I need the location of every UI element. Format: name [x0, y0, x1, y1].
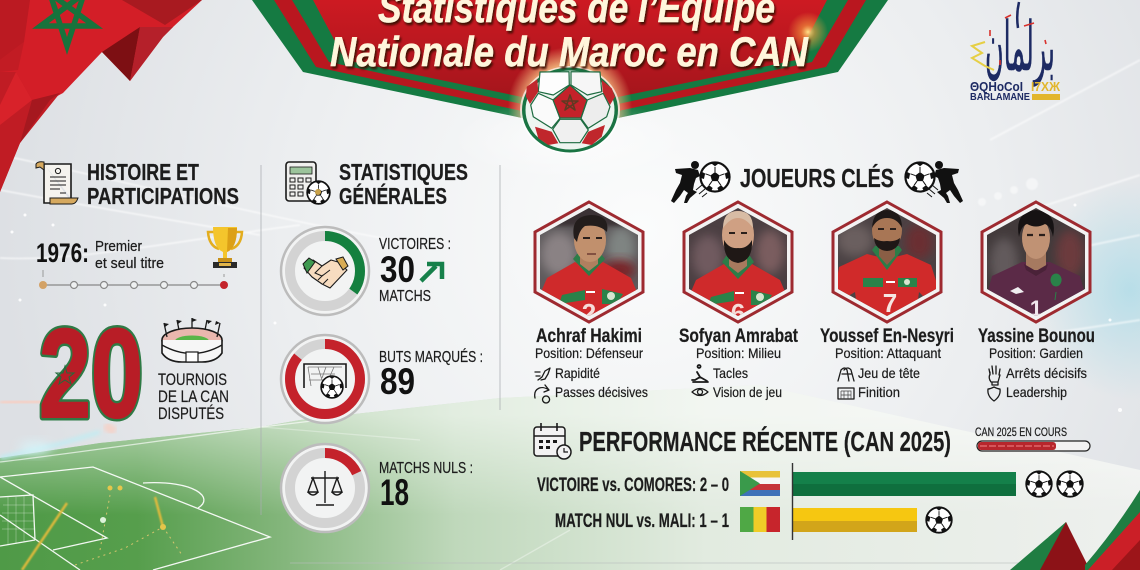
- player card: Sofyan Amrabat: [678, 202, 799, 400]
- portrait: Bounou: [976, 202, 1096, 322]
- portrait: Amrabat: 6: [731, 298, 745, 328]
- panel: statistiques generales: [281, 159, 483, 532]
- player name: Youssef En-Nesyri: [820, 326, 954, 347]
- label: tournois: DISPUTÉS: [158, 404, 224, 423]
- stat ring: nuls: [281, 444, 473, 532]
- progress: CAN 2025 en cours: [975, 425, 1090, 451]
- axis line: [792, 463, 794, 540]
- stat ring: nuls: MATCHS NULS :: [379, 460, 473, 477]
- icon: shield: [988, 387, 1000, 401]
- stat ring: victoires: 30: [380, 249, 415, 290]
- pitch lines: [0, 420, 570, 570]
- top-left red polygon corner: [0, 0, 202, 192]
- stat ring: nuls: 18: [380, 472, 409, 513]
- logo: Barlamane: [970, 2, 1060, 103]
- icon: player right with ball: [905, 161, 963, 203]
- icon: calculator and ball: [286, 162, 330, 204]
- heading: performance: PERFORMANCE RÉCENTE (CAN 2025): [579, 426, 951, 457]
- logo: Barlamane: I7XЖ: [1031, 79, 1060, 94]
- player name: Achraf Hakimi: [536, 326, 642, 347]
- player name: Sofyan Amrabat: [679, 326, 799, 347]
- heading: histoire: HISTOIRE ET: [87, 159, 199, 185]
- icon: handshake: [303, 257, 348, 288]
- icon: header: [838, 368, 854, 381]
- icon: central football: [520, 66, 620, 154]
- icon: calendar and clock: [534, 423, 571, 459]
- stat ring: victoires: MATCHS: [379, 288, 431, 305]
- title text: Nationale du Maroc en CAN: [330, 28, 809, 75]
- vertical dividers: [261, 165, 500, 515]
- icon: ball: [1026, 471, 1052, 497]
- icon: assist: [535, 385, 550, 403]
- player card: Sofyan Amrabat: Tacles: [713, 365, 748, 381]
- label: tournois: DE LA CAN: [158, 387, 229, 406]
- heading: histoire: [87, 159, 239, 209]
- logo: Barlamane: BARLAMANE: [970, 92, 1030, 103]
- player card: Youssef En-Nesyri: Jeu de tête: [858, 365, 920, 381]
- bar row: mali: MATCH NUL vs. MALI: 1 – 1: [555, 511, 729, 532]
- progress: CAN 2025 en cours: CAN 2025 EN COURS: [975, 425, 1067, 439]
- bar row: mali: [555, 507, 952, 533]
- logo: Barlamane: ΘQHoCoI: [970, 79, 1023, 94]
- icon: scroll: [36, 162, 78, 204]
- timeline: [39, 270, 228, 289]
- year 1976: Premier: [95, 238, 142, 255]
- icon: eye: [692, 388, 708, 396]
- stat ring: victoires: [281, 227, 451, 315]
- icon: goal and ball: [304, 364, 346, 398]
- heading: statistiques: STATISTIQUES: [339, 159, 468, 185]
- player card: Achraf Hakimi: Rapidité: [555, 365, 600, 381]
- portrait: En-Nesyri: [827, 202, 947, 322]
- year 1976: 1976:: [36, 238, 89, 268]
- panel: performance recente: [534, 423, 1090, 540]
- heading: histoire: PARTICIPATIONS: [87, 183, 239, 209]
- icon: glove: [989, 366, 1000, 385]
- player card: Yassine Bounou: Leadership: [1006, 384, 1067, 400]
- icon: player left with ball: [671, 161, 730, 203]
- player card: Yassine Bounou: Arrêts décisifs: [1006, 365, 1087, 381]
- icon: tackle: [692, 365, 708, 382]
- flag: mali: [740, 507, 780, 532]
- flag: comores: [740, 471, 780, 496]
- stat ring: victoires: VICTOIRES :: [379, 236, 451, 253]
- player card: Yassine Bounou: [976, 202, 1096, 401]
- portrait: En-Nesyri: 7: [883, 288, 897, 318]
- big number 20: 20: [39, 303, 143, 444]
- title text: [330, 0, 809, 75]
- year 1976: [36, 238, 164, 272]
- player card: Youssef En-Nesyri: Finition: [858, 384, 900, 400]
- icon: moroccan star: [40, 0, 95, 46]
- player card: Youssef En-Nesyri: [820, 202, 954, 400]
- bottom rule: [290, 562, 1020, 564]
- stat ring: buts: [281, 335, 483, 423]
- heading: joueurs cles: JOUEURS CLÉS: [740, 163, 894, 193]
- icon: trophy: [208, 227, 242, 268]
- year 1976: et seul titre: [95, 255, 164, 272]
- player card: Sofyan Amrabat: Position: Milieu: [696, 345, 781, 361]
- icon: ball: [926, 507, 952, 533]
- portrait: Bounou: 1: [1030, 296, 1042, 321]
- player card: Achraf Hakimi: Passes décisives: [555, 384, 648, 400]
- portrait: Hakimi: 2: [582, 298, 596, 328]
- icon: net: [838, 388, 854, 399]
- player card: Sofyan Amrabat: Vision de jeu: [713, 384, 782, 400]
- player card: Achraf Hakimi: [529, 202, 649, 403]
- icon: scales: [308, 471, 342, 505]
- player name: Yassine Bounou: [978, 326, 1095, 347]
- big number 20: 20: [39, 303, 143, 444]
- stat ring: buts: BUTS MARQUÉS :: [379, 347, 483, 366]
- heading: statistiques: [339, 159, 468, 209]
- icon: ball: [1057, 471, 1083, 497]
- panel: joueurs cles: [529, 161, 1096, 403]
- bar row: comores: [537, 471, 1083, 497]
- portrait: Amrabat: [678, 202, 798, 328]
- bar row: comores: VICTOIRE vs. COMORES: 2 – 0: [537, 475, 729, 496]
- label: tournois: TOURNOIS: [158, 370, 227, 389]
- stat ring: buts: 89: [380, 361, 415, 402]
- panel: histoire et participations: [36, 159, 242, 444]
- player card: Yassine Bounou: Position: Gardien: [989, 345, 1083, 361]
- title banner: [252, 0, 888, 118]
- portrait: Hakimi: [529, 202, 649, 328]
- bottom-right polygon corner: [1010, 490, 1140, 570]
- player card: Youssef En-Nesyri: Position: Attaquant: [835, 345, 941, 361]
- player card: Achraf Hakimi: Position: Défenseur: [535, 345, 643, 361]
- label: tournois: [158, 370, 229, 423]
- heading: statistiques: GÉNÉRALES: [339, 182, 447, 209]
- icon: stadium: [162, 318, 222, 362]
- glow below ball: [450, 100, 690, 180]
- icon: speed: [535, 368, 550, 380]
